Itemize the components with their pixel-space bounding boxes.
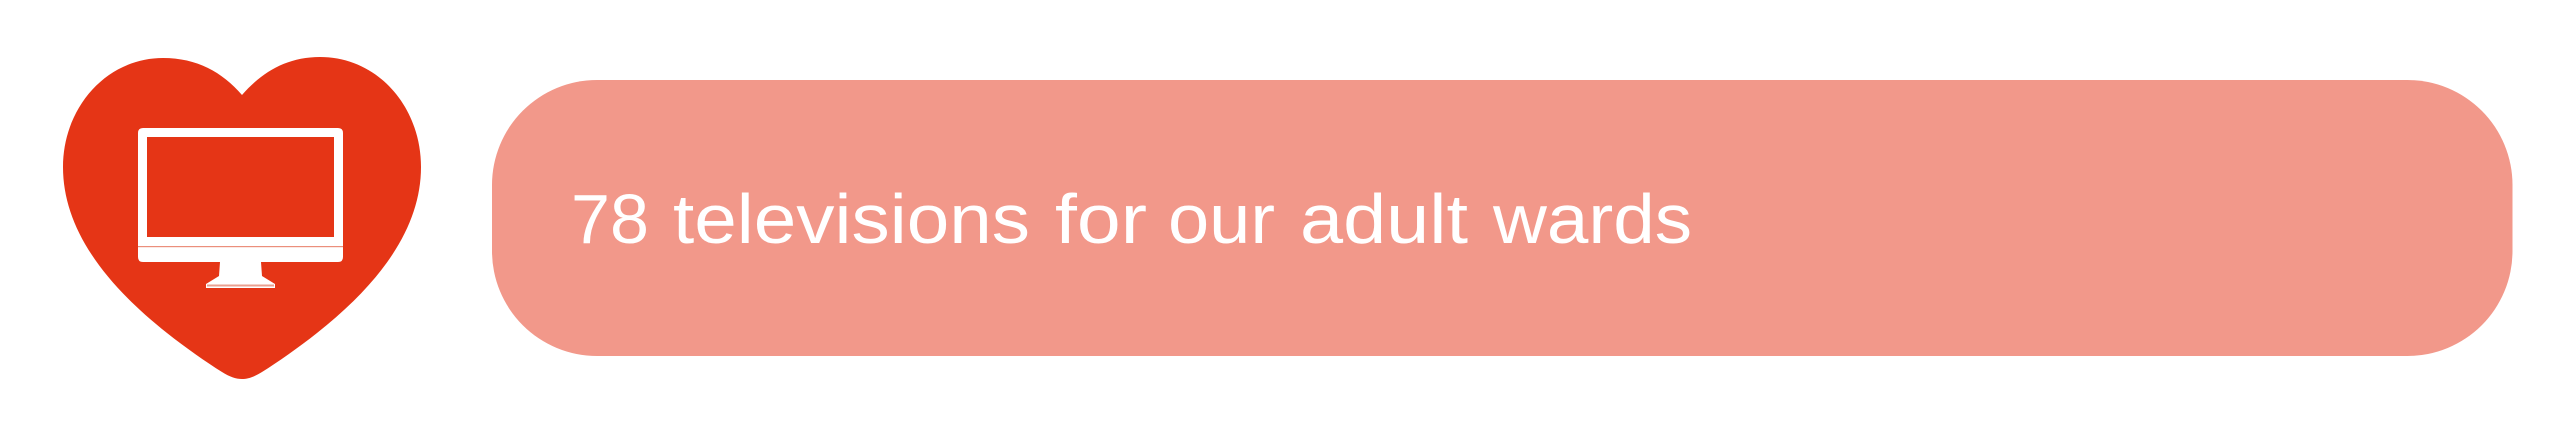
heart — [63, 57, 421, 379]
caption text: for — [1055, 180, 1147, 258]
caption text: wards — [1492, 180, 1692, 258]
panel: caption — [492, 80, 2512, 356]
caption text: 78 — [571, 180, 649, 258]
caption text: televisions — [673, 180, 1030, 258]
monitor — [138, 128, 343, 288]
caption text: adult — [1300, 180, 1468, 258]
icon: heart with monitor — [63, 57, 421, 379]
caption text: our — [1168, 180, 1275, 258]
panel background — [492, 80, 2512, 356]
